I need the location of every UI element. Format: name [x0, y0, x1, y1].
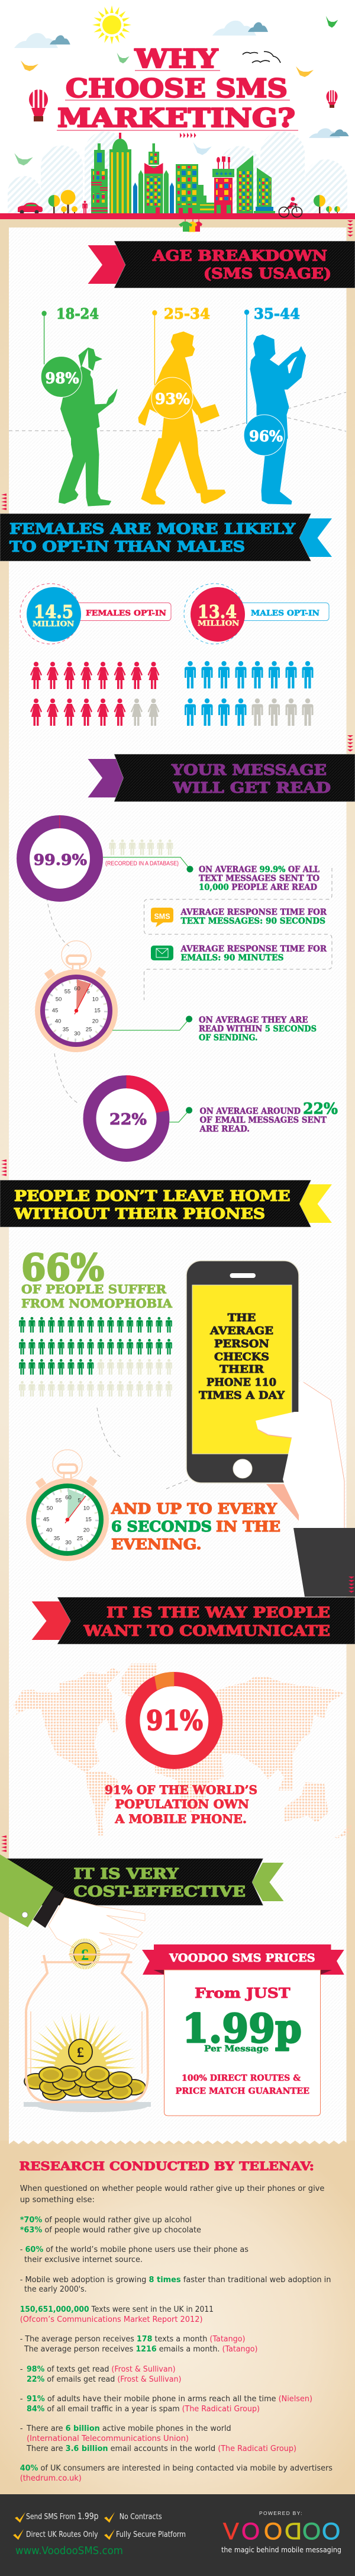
- footer url: www.VoodooSMS.com: [15, 2545, 123, 2557]
- voodoo logo: O: [322, 2519, 340, 2545]
- banner: females more likely: FEMALES ARE MORE LIKELY: [9, 520, 296, 537]
- stat: females opt-in: [20, 584, 171, 644]
- voodoo logo: O: [264, 2519, 282, 2545]
- stat: 66% nomophobia: OF PEOPLE SUFFER: [21, 1282, 166, 1296]
- phone message: PHONE 110: [206, 1376, 276, 1389]
- research text: - 60% of the world’s mobile phone users use their phone as: [20, 2245, 248, 2254]
- callout: 22% email read: OF EMAIL MESSAGES SENT: [200, 1116, 327, 1125]
- banner: your message: [88, 754, 355, 802]
- donut: 91%: [133, 1672, 215, 1762]
- text: every 6 seconds: EVENING.: [111, 1536, 202, 1553]
- research text: 150,651,000,000 Texts were sent in the UK in 2011: [20, 2305, 214, 2314]
- stopwatch: 5 seconds: 40: [55, 1018, 61, 1025]
- price ribbon: VOODOO SMS PRICES: [169, 1952, 315, 1965]
- stopwatch: 5 seconds: 20: [92, 1018, 98, 1025]
- banner: cost-effective: IT IS VERY: [73, 1865, 179, 1882]
- text: sms response time: [180, 908, 327, 926]
- main white panel: [9, 228, 347, 2144]
- stopwatch: 5 seconds: 35: [63, 1026, 69, 1033]
- research text: -: [20, 2364, 23, 2374]
- banner: people don't leave home: PEOPLE DON’T LEAVE HOME: [14, 1187, 291, 1204]
- research heading: RESEARCH CONDUCTED BY TELENAV:: [19, 2159, 314, 2173]
- jar of coins: £: [77, 2045, 84, 2061]
- phone message: TIMES A DAY: [199, 1389, 285, 1402]
- text: 91% own a mobile: A MOBILE PHONE.: [114, 1812, 247, 1826]
- stopwatch: 6 seconds: 50: [47, 1505, 53, 1512]
- figure: 25-34 yellow person: [138, 305, 225, 504]
- black birds: [243, 52, 280, 63]
- title: MARKETING?: [57, 104, 295, 133]
- research text: 22% of emails get read (Frost & Sullivan): [27, 2375, 181, 2384]
- stat: males opt-in: MILLION: [198, 619, 239, 627]
- donut: 22%: 22%: [109, 1111, 147, 1129]
- banner: your message: YOUR MESSAGE: [171, 761, 327, 778]
- research text: The average person receives 1216 emails a month. (Tatango): [24, 2344, 258, 2354]
- text: every 6 seconds: AND UP TO EVERY: [111, 1500, 277, 1517]
- voodoo logo: O: [302, 2519, 321, 2545]
- research text: -: [20, 2394, 23, 2404]
- research text: (International Telecommunications Union): [27, 2434, 189, 2443]
- text: every 6 seconds: IN THE: [216, 1518, 280, 1535]
- text: email response time: EMAILS: 90 MINUTES: [181, 953, 284, 963]
- icon: sms bubble: SMS: [154, 912, 170, 921]
- stat: females opt-in: FEMALES OPT-IN: [86, 609, 166, 618]
- callout: 22% email read: 22%: [303, 1100, 338, 1118]
- text: 91% own a mobile: [105, 1783, 257, 1826]
- price card: [164, 1970, 321, 2116]
- stopwatch: 6 seconds: 20: [83, 1527, 89, 1533]
- price card: From JUST: [195, 1985, 291, 2001]
- stopwatch: 6 seconds: 10: [83, 1505, 89, 1512]
- small people row: [109, 840, 173, 855]
- text: every 6 seconds: [111, 1500, 280, 1553]
- footer selling points: Send SMS From 1.99p: [26, 2511, 98, 2521]
- price card: 100% DIRECT ROUTES &: [182, 2074, 301, 2083]
- paper birds: [14, 16, 338, 165]
- jar of coins: [24, 1940, 151, 2112]
- banner: way people communicate: IT IS THE WAY PEOPLE: [106, 1604, 330, 1621]
- voodoo logo: V: [223, 2519, 239, 2545]
- research text: *63% of people would rather give up chocolate: [20, 2225, 201, 2235]
- stopwatch: 5 seconds: 5: [86, 988, 90, 995]
- footer selling points: Fully Secure Platform: [116, 2530, 186, 2539]
- price card: Per Message: [204, 2044, 269, 2053]
- stat: males opt-in: [184, 584, 329, 644]
- research text: -: [20, 2424, 23, 2433]
- banner: cost-effective: [0, 1859, 284, 1905]
- stopwatch: 6 seconds: 40: [46, 1527, 52, 1533]
- title: WHY: [134, 44, 219, 74]
- figure: 18-24 green person: [41, 305, 117, 506]
- stopwatch: 5 seconds: 15: [94, 1007, 101, 1014]
- header scene: [0, 0, 355, 219]
- stat: 66% nomophobia: 66%: [21, 1246, 104, 1289]
- research text: - The average person receives 178 texts a month (Tatango): [20, 2334, 245, 2344]
- banner: way people communicate: WANT TO COMMUNICATE: [83, 1622, 330, 1639]
- research text: 84% of all email traffic in a year is spam (The Radicati Group): [27, 2404, 260, 2414]
- phone message: THEIR: [220, 1363, 264, 1376]
- donut: 91%: 91%: [146, 1704, 203, 1736]
- stopwatch: 5 seconds: [35, 941, 118, 1052]
- banner: people don't leave home: [0, 1180, 332, 1227]
- trees and people: [49, 190, 340, 213]
- voodoo logo: O: [241, 2519, 260, 2545]
- stopwatch: 6 seconds: 55: [56, 1498, 62, 1504]
- icon: sms bubble: [151, 908, 173, 927]
- banner: cost-effective: COST-EFFECTIVE: [73, 1883, 246, 1900]
- research text: up something else:: [20, 2195, 95, 2205]
- stopwatch: 5 seconds: 30: [74, 1031, 80, 1037]
- businessman hand and sleeve: [0, 1854, 145, 1951]
- banner: age breakdown: AGE BREAKDOWN: [152, 247, 327, 264]
- research text: 40% of UK consumers are interested in being contacted via mobile by advertisers: [20, 2463, 333, 2473]
- city skyline: ★★★★: [215, 171, 233, 177]
- text: 91% own a mobile: 91% OF THE WORLD’S: [105, 1783, 257, 1797]
- stopwatch: 5 seconds: 50: [56, 997, 62, 1002]
- research text: their exclusive internet source.: [24, 2255, 143, 2264]
- footer checkmarks: [13, 2512, 115, 2540]
- stopwatch: 6 seconds: 25: [77, 1536, 83, 1542]
- banner: females more likely: TO OPT-IN THAN MALES: [9, 538, 245, 555]
- text: sms response time: AVERAGE RESPONSE TIME FOR: [180, 908, 327, 917]
- stat: males opt-in: 13.4: [198, 602, 237, 623]
- price card: PRICE MATCH GUARANTEE: [176, 2087, 309, 2096]
- jar of coins: £: [81, 1946, 89, 1963]
- phone message: THE: [228, 1312, 256, 1324]
- connector paths: [45, 868, 332, 1489]
- figure: 18-24 green person: 98%: [45, 370, 79, 387]
- red arrows: [180, 133, 196, 138]
- stopwatch: 6 seconds: 35: [54, 1536, 60, 1542]
- stat: females opt-in: 14.5: [34, 602, 73, 623]
- icon: sun: [92, 5, 131, 44]
- pictogram: males: [185, 661, 314, 726]
- tagline: the magic behind mobile messaging: [221, 2545, 341, 2554]
- voodoo logo: D: [285, 2519, 302, 2545]
- stopwatch: 6 seconds: 60: [65, 1494, 72, 1501]
- footer selling points: No Contracts: [120, 2513, 162, 2521]
- research text: When questioned on whether people would rather give up their phones or give: [20, 2184, 324, 2193]
- red car: [18, 203, 43, 214]
- text: sms response time: TEXT MESSAGES: 90 SECONDS: [181, 917, 325, 926]
- figure: 35-44 blue person: [244, 305, 306, 504]
- phone message: PERSON: [214, 1338, 269, 1350]
- figure: 35-44 blue person: 35-44: [254, 305, 300, 322]
- banner: your message: WILL GET READ: [173, 779, 331, 796]
- callout: 22% email read: ON AVERAGE AROUND: [200, 1107, 301, 1116]
- research text: (Ofcom’s Communications Market Report 2012): [20, 2315, 202, 2324]
- figure: 25-34 yellow person: 25-34: [164, 305, 210, 322]
- research text: 98% of texts get read (Frost & Sullivan): [27, 2364, 176, 2374]
- phone message: CHECKS: [214, 1351, 269, 1363]
- figure: 25-34 yellow person: 93%: [155, 390, 190, 408]
- research section: [0, 2133, 355, 2494]
- stopwatch: 6 seconds: 15: [85, 1517, 92, 1523]
- voodoo logo: [223, 2519, 340, 2545]
- stopwatch: 6 seconds: 45: [43, 1517, 49, 1523]
- callout: read within 5 seconds: READ WITHIN 5 SECONDS: [199, 1024, 317, 1034]
- phone message: [199, 1312, 285, 1402]
- text: 91% own a mobile: POPULATION OWN: [115, 1797, 249, 1811]
- world map: [10, 1664, 353, 1838]
- banner: age breakdown: (SMS USAGE): [204, 265, 331, 282]
- stopwatch: 5 seconds: 60: [74, 986, 80, 992]
- donut: 99.9%: [23, 815, 96, 895]
- donut: 99.9%: 99.9%: [34, 851, 87, 869]
- callout: read within 5 seconds: [112, 1015, 317, 1043]
- stat: 66% nomophobia: FROM NOMOPHOBIA: [21, 1296, 172, 1311]
- research text: There are 3.6 billion email accounts in the world (The Radicati Group): [26, 2444, 296, 2453]
- price ribbon: [142, 1944, 344, 1975]
- city skyline: [91, 133, 275, 218]
- footer selling points: Direct UK Routes Only: [26, 2530, 98, 2539]
- text: email response time: [180, 944, 327, 963]
- hot air balloons: [29, 89, 337, 121]
- research text: [20, 2184, 333, 2483]
- stopwatch: 6 seconds: 30: [65, 1539, 72, 1546]
- stat: males opt-in: MALES OPT-IN: [251, 609, 320, 618]
- research text: the early 2000's.: [24, 2285, 87, 2294]
- decorative arrows: [1, 220, 353, 1852]
- callout: 99.9% read: [103, 857, 320, 892]
- icon: email: [151, 946, 173, 960]
- callout: 22% email read: [169, 1100, 338, 1134]
- clouds: [14, 21, 349, 138]
- callout: 99.9% read: 10,000 PEOPLE ARE READ: [199, 883, 317, 892]
- pictogram: 66 of 100 people: [19, 1317, 172, 1396]
- label: recorded in a database: (RECORDED IN A DATABASE): [105, 860, 179, 867]
- phone message: AVERAGE: [209, 1325, 273, 1337]
- ground: [0, 213, 355, 219]
- stopwatch: 6 seconds: [26, 1450, 109, 1561]
- phone: [186, 1261, 299, 1483]
- research text: - Mobile web adoption is growing 8 times faster than traditional web adoption in: [20, 2275, 331, 2285]
- figure: 35-44 blue person: 96%: [249, 428, 283, 445]
- text: every 6 seconds: 6 SECONDS: [111, 1518, 212, 1535]
- stat: 66% nomophobia: [21, 1246, 172, 1311]
- dashed ground lines: [9, 392, 346, 431]
- research text: There are 6 billion active mobile phones in the world: [26, 2424, 231, 2433]
- research text: *70% of people would rather give up alcohol: [20, 2215, 192, 2225]
- stopwatch: 5 seconds: 55: [64, 988, 70, 995]
- price card: 1.99p: [182, 2005, 302, 2052]
- callout: 22% email read: ARE READ.: [199, 1124, 250, 1134]
- footer selling points: [26, 2511, 186, 2539]
- callout: read within 5 seconds: OF SENDING.: [199, 1033, 258, 1043]
- callout: 99.9% read: ON AVERAGE 99.9% OF ALL: [199, 865, 320, 874]
- stopwatch: 5 seconds: 45: [52, 1007, 58, 1014]
- arrows on sleeve: [348, 1577, 354, 1593]
- title: [57, 44, 298, 133]
- stopwatch: 5 seconds: 25: [86, 1026, 92, 1033]
- title: CHOOSE SMS: [66, 74, 288, 104]
- hand holding phone: [256, 1382, 355, 1597]
- stat: females opt-in: MILLION: [33, 619, 75, 628]
- stopwatch: 5 seconds: 10: [92, 997, 98, 1002]
- pictogram: females: [30, 662, 160, 726]
- banner: people don't leave home: WITHOUT THEIR PHONES: [14, 1205, 265, 1222]
- research text: 91% of adults have their mobile phone in arms reach all the time (Nielsen): [27, 2394, 312, 2404]
- banner: females more likely: [0, 514, 332, 561]
- text: email response time: AVERAGE RESPONSE TIME FOR: [180, 944, 327, 954]
- powered by: POWERED BY:: [259, 2510, 303, 2516]
- icon: t-shirts: [179, 219, 202, 232]
- callout: read within 5 seconds: ON AVERAGE THEY ARE: [199, 1015, 308, 1025]
- banner: age breakdown: [88, 241, 355, 288]
- banner: way people communicate: [32, 1597, 355, 1644]
- research text: (thedrum.co.uk): [20, 2474, 82, 2483]
- donut: 22%: [90, 1075, 169, 1155]
- cyclist: [279, 197, 302, 217]
- callout: 99.9% read: TEXT MESSAGES SENT TO: [199, 874, 320, 883]
- figure: 18-24 green person: 18-24: [56, 305, 99, 322]
- footer: [0, 2494, 355, 2576]
- stopwatch: 6 seconds: 5: [78, 1498, 81, 1504]
